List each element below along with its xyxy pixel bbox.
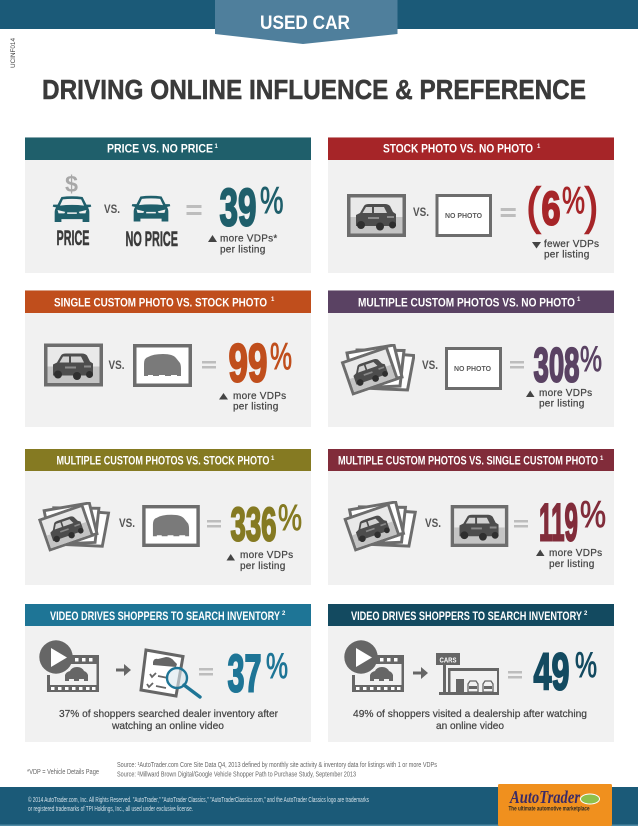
label: no price: NO PRICE	[126, 228, 178, 251]
stat: (6%): %	[562, 180, 585, 222]
icon: car with price	[53, 196, 91, 222]
text: vs: VS.	[119, 518, 135, 530]
stat caption	[226, 550, 293, 572]
icon: arrow	[116, 664, 131, 676]
stat caption: more VDPs	[240, 550, 293, 561]
stat caption	[208, 234, 278, 256]
equals	[501, 208, 516, 217]
stat: 39%: %	[260, 180, 284, 222]
equals	[508, 671, 522, 678]
footnote: sources: Source: ¹AutoTrader.com Core Site Data Q4, 2013 defined by monthly site activity & inventory data for listings with 1 or more VDPs	[117, 762, 437, 769]
description: 37% of shoppers searched dealer inventory after	[59, 708, 278, 720]
icon: photo stack	[345, 502, 415, 550]
top banner	[0, 0, 638, 29]
heading: VIDEO DRIVES SHOPPERS TO SEARCH INVENTORY	[50, 609, 280, 623]
equals	[186, 205, 202, 215]
stat caption	[526, 388, 592, 410]
stat: (6%): 6	[542, 182, 560, 234]
stat: 49%: %	[575, 646, 597, 685]
icon: video	[39, 640, 99, 692]
footer bar	[0, 787, 638, 826]
icon: photo stack	[342, 345, 414, 394]
equals	[510, 361, 524, 368]
heading: MULTIPLE CUSTOM PHOTOS VS. NO PHOTO	[358, 296, 575, 310]
text: vs: VS.	[422, 360, 438, 372]
stat caption: per listing	[240, 561, 286, 572]
legal text: or registered trademarks of TPI Holdings, Inc., all used under exclusive license.	[28, 806, 193, 813]
panel: price vs no price	[25, 137, 311, 273]
icon: green oval	[580, 794, 600, 804]
description	[59, 708, 278, 732]
stat caption: more VDPs	[549, 548, 602, 559]
legal text	[28, 796, 369, 813]
legal text: © 2014 AutoTrader.com, Inc. All Rights Reserved. "AutoTrader," "AutoTrader Classics," "AutoTraderClassics.com," and the AutoTrader Classics logo are trademarks	[28, 796, 369, 804]
panel: single custom photo vs stock photo	[25, 290, 311, 427]
stat: 336%: 336	[230, 498, 276, 550]
panel: price vs no price: 1	[214, 144, 218, 150]
stat: 119%: %	[580, 494, 606, 535]
stat caption: per listing	[544, 250, 590, 260]
description: watching an online video	[111, 720, 224, 732]
icon: no photo: NO PHOTO	[445, 211, 482, 220]
stat caption: per listing	[220, 245, 266, 256]
footnote: sources: Source: ²Millward Brown Digital/Google Vehicle Shopper Path to Purchase Study, September 2013	[117, 772, 356, 778]
panel: stock photo vs no photo	[328, 137, 614, 273]
text: vs: VS.	[108, 360, 124, 372]
icon: photo stack	[40, 503, 109, 550]
footnote: sources	[117, 762, 437, 778]
panel: stock photo vs no photo: 1	[537, 144, 541, 150]
panel: multiple custom photos vs no photo	[328, 290, 614, 427]
icon: no photo: NO PHOTO	[454, 364, 491, 373]
stat: 99%: 99	[228, 334, 268, 394]
stat caption: more VDPs	[539, 388, 592, 399]
description: an online video	[436, 720, 504, 732]
panel: video drives dealership visits	[328, 604, 614, 742]
icon: no photo	[437, 196, 490, 236]
stat caption: fewer VDPs	[544, 239, 599, 250]
tagline: The ultimate automotive marketplace	[508, 806, 590, 812]
stat: 37%: 37	[228, 644, 262, 704]
stat: (6%)	[526, 178, 598, 234]
stat: 336%: %	[278, 497, 302, 538]
text: vs: VS.	[104, 204, 120, 216]
document code: UCINF014	[11, 37, 17, 68]
stat: 119%: 119	[539, 494, 578, 552]
tab: used car: USED CAR	[260, 13, 350, 34]
icon: arrow	[413, 667, 428, 679]
panel: multiple custom photos vs single custom photo: 1	[600, 456, 604, 462]
icon: dealership	[436, 653, 499, 695]
icon: stock silhouette	[144, 507, 198, 545]
text: vs: VS.	[413, 207, 429, 219]
stat caption: more VDPs	[233, 391, 286, 402]
icon: car without price	[132, 196, 170, 222]
equals	[199, 668, 213, 676]
footnote: VDP definition: *VDP = Vehicle Details Page	[27, 769, 99, 776]
panel: multiple custom photos vs single custom photo	[328, 449, 614, 585]
logo: AutoTrader	[498, 784, 612, 826]
stat: 99%: %	[270, 336, 292, 378]
stat: 49%: 49	[534, 644, 570, 702]
panel: video drives search	[25, 604, 311, 742]
panel: multiple custom photos vs stock photo: 1	[271, 456, 275, 462]
stat: 308%: %	[580, 340, 602, 379]
icon: video	[344, 640, 404, 692]
description: 49% of shoppers visited a dealership after watching	[353, 708, 587, 720]
stat caption: per listing	[549, 559, 595, 570]
stat caption	[532, 239, 599, 260]
stat caption	[219, 391, 286, 412]
stat caption: per listing	[539, 399, 585, 410]
icon: dollar sign: $	[65, 171, 78, 197]
stat: (6%): )	[585, 178, 598, 234]
heading: PRICE VS. NO PRICE	[107, 142, 213, 156]
heading: SINGLE CUSTOM PHOTO VS. STOCK PHOTO	[54, 296, 267, 310]
heading: STOCK PHOTO VS. NO PHOTO	[383, 142, 533, 156]
icon: custom photo	[46, 345, 101, 385]
icon: stock silhouette	[135, 346, 190, 385]
panel: multiple custom photos vs stock photo	[25, 449, 311, 585]
stat: 37%: %	[266, 647, 288, 686]
stat: (6%): (	[526, 178, 541, 234]
icon: custom photo	[452, 507, 507, 545]
icon: stock photo	[349, 196, 404, 235]
text: vs: VS.	[425, 518, 441, 530]
equals	[207, 520, 221, 528]
stat: 39%: 39	[220, 178, 256, 238]
panel: single custom photo vs stock photo: 1	[271, 297, 275, 303]
label: price: PRICE	[56, 227, 90, 250]
heading: MULTIPLE CUSTOM PHOTOS VS. STOCK PHOTO	[56, 453, 270, 467]
stat: 308%: 308	[534, 340, 580, 392]
icon: no photo	[446, 348, 500, 388]
stat caption	[536, 548, 602, 570]
equals	[514, 520, 528, 528]
tab: used car	[215, 0, 398, 44]
stat caption: more VDPs*	[220, 234, 278, 244]
icon: checklist and magnifier	[141, 650, 200, 697]
equals	[202, 361, 216, 368]
panel: video drives search: 2	[282, 611, 286, 617]
panel: video drives dealership visits: 2	[584, 611, 588, 617]
description	[353, 708, 587, 732]
logo: AutoTrader: AutoTrader	[509, 787, 581, 807]
panel: multiple custom photos vs no photo: 1	[577, 297, 581, 303]
icon: dealership: CARS	[440, 656, 456, 664]
stat caption: per listing	[233, 402, 279, 412]
